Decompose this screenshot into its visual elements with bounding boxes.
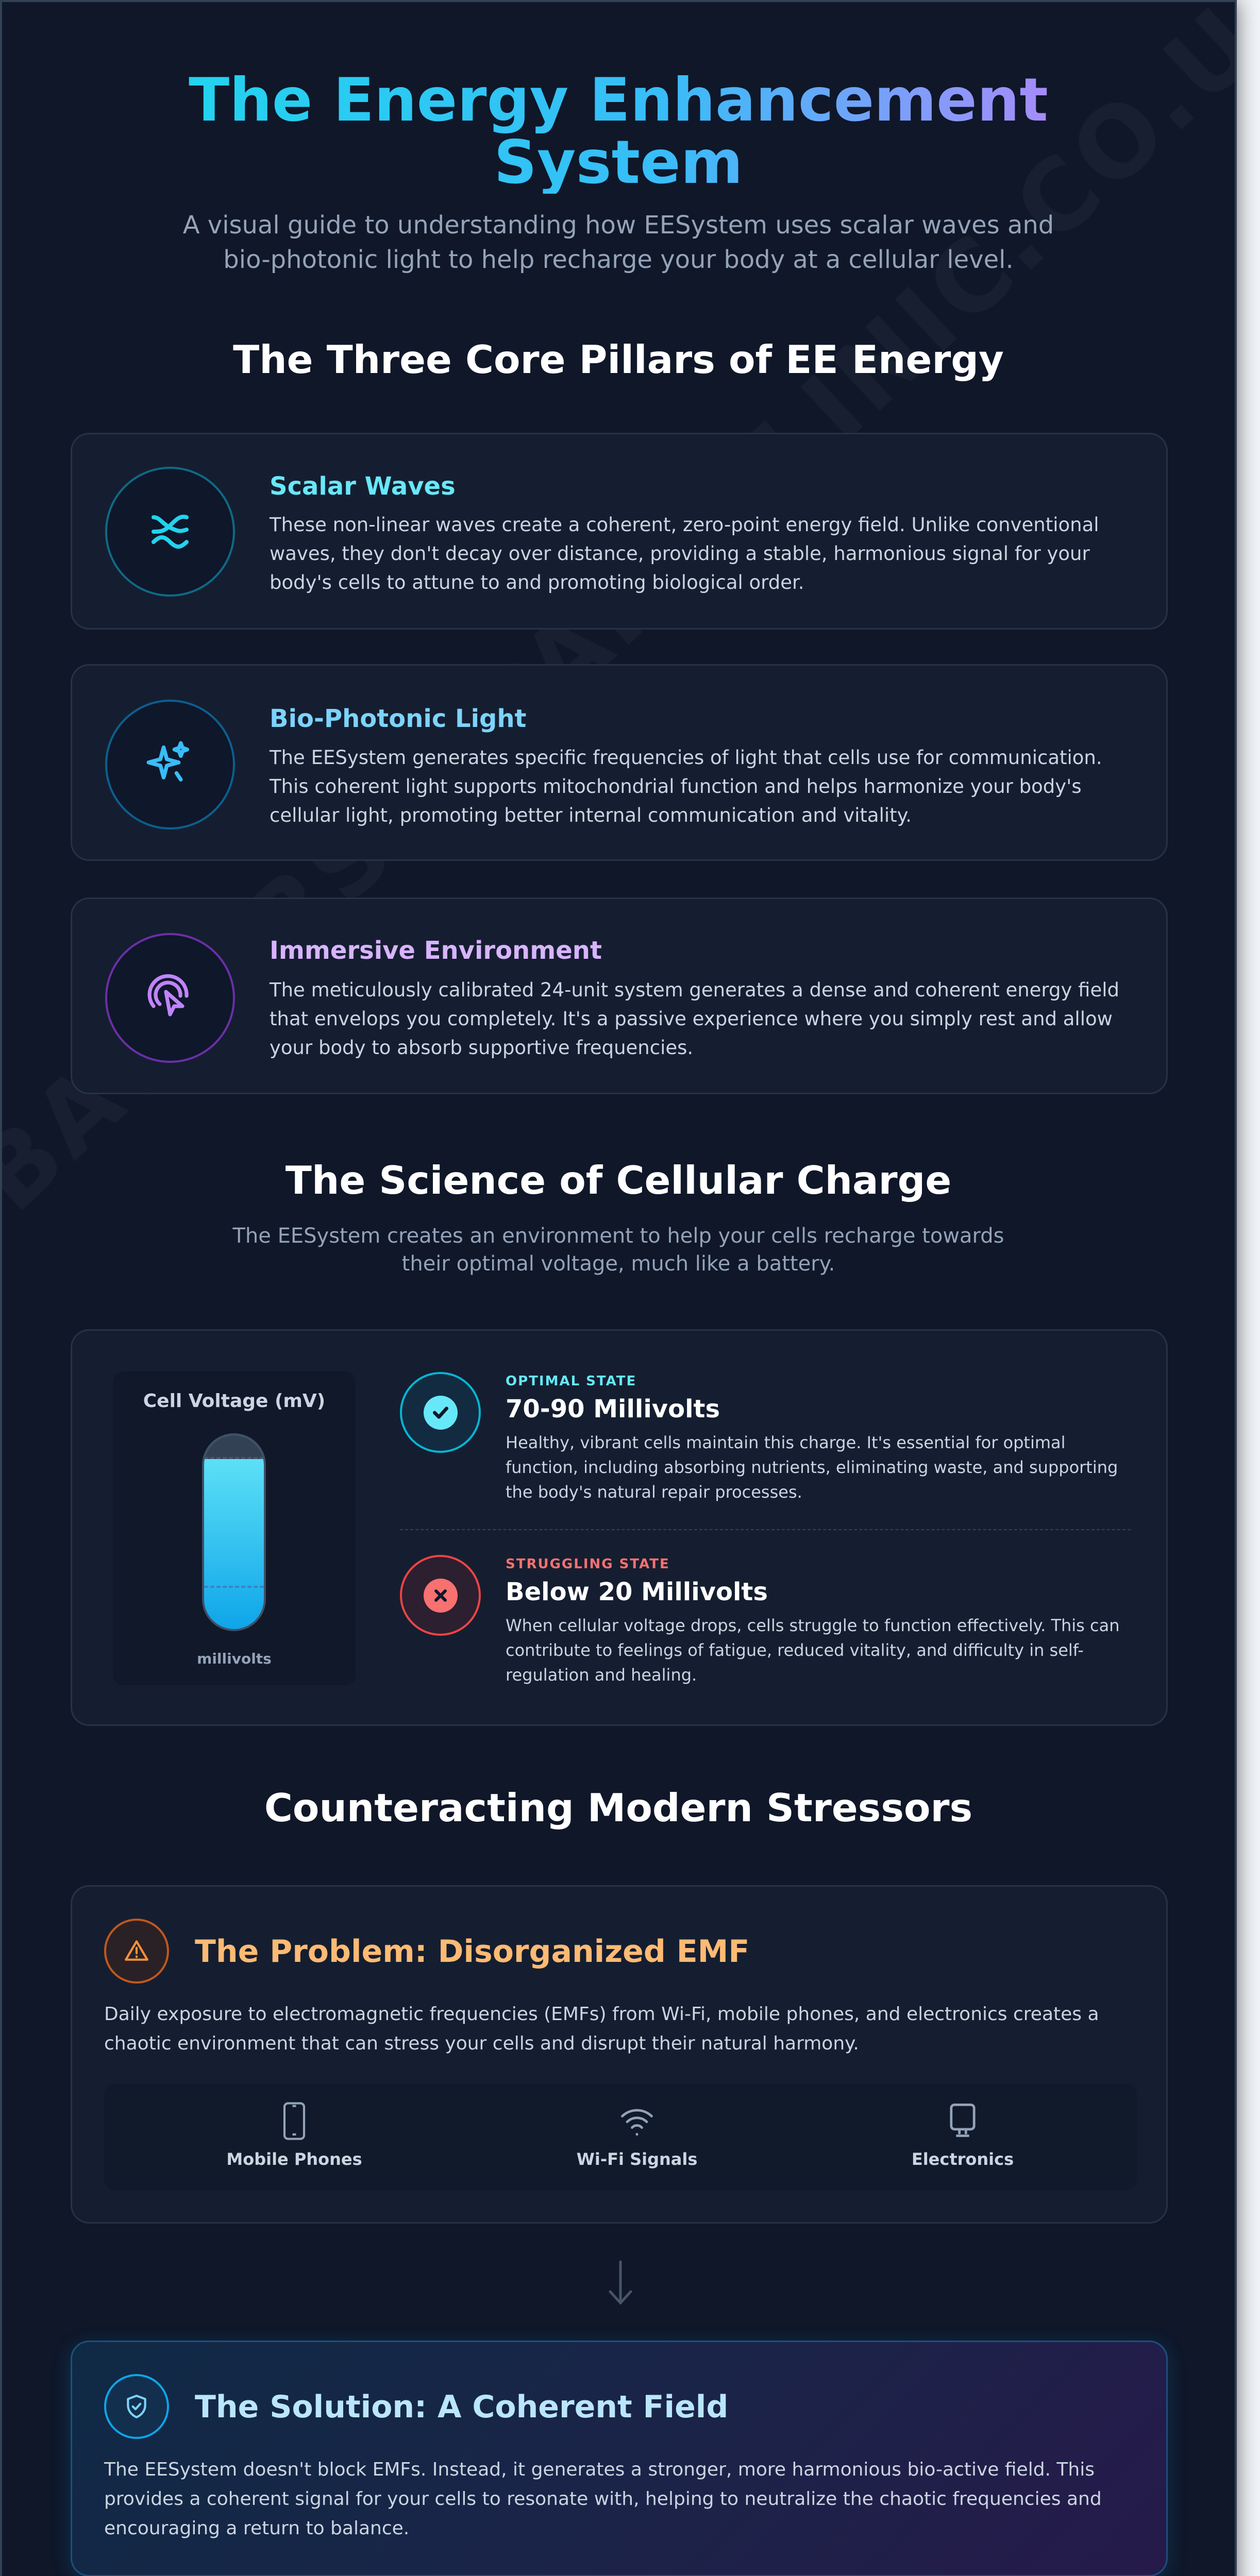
arrow bbox=[609, 2261, 632, 2305]
icon: electronics: Electronics bbox=[912, 2149, 1014, 2169]
heading: science: The Science of Cellular Charge bbox=[285, 1158, 951, 1203]
icon: wifi bbox=[577, 2109, 697, 2169]
struggling state text: STRUGGLING STATE bbox=[506, 1556, 670, 1572]
icon: electronics bbox=[912, 2104, 1014, 2169]
icon: wifi: Wi-Fi Signals bbox=[577, 2149, 697, 2169]
optimal state text bbox=[506, 1374, 1118, 1502]
chart: voltage tube: millivolts bbox=[197, 1650, 272, 1667]
icon: fingerprint cursor bbox=[105, 933, 235, 1063]
icon: warning bbox=[104, 1919, 169, 1984]
title: System bbox=[494, 128, 743, 197]
text: Bio-Photonic Light bbox=[270, 704, 527, 733]
heading: pillars: The Three Core Pillars of EE Energy bbox=[233, 337, 1004, 382]
subtitle: science: their optimal voltage, much like a battery. bbox=[402, 1252, 835, 1276]
panel: problem bbox=[71, 1885, 1168, 2224]
subtitle bbox=[183, 211, 1054, 274]
panel: scalar waves bbox=[71, 433, 1168, 630]
title: The Energy Enhancement bbox=[189, 65, 1048, 135]
optimal state text: Healthy, vibrant cells maintain this charge. It's essential for optimal function, including absorbing nutrients, eliminating waste, and supporting the body's natural repair processes. bbox=[506, 1433, 1118, 1502]
icon: cross bbox=[400, 1555, 481, 1636]
panel: immersive environment bbox=[71, 897, 1168, 1094]
optimal state text: 70-90 Millivolts bbox=[506, 1395, 720, 1423]
heading: stressors: Counteracting Modern Stressors bbox=[264, 1785, 972, 1831]
icon: mobile phones bbox=[226, 2102, 362, 2169]
struggling state text: When cellular voltage drops, cells struggle to function effectively. This can contribute to feelings of fatigue, reduced vitality, and difficulty in self-regulation and healing. bbox=[506, 1616, 1119, 1685]
sources bbox=[104, 2083, 1137, 2190]
icon: sparkles bbox=[105, 700, 235, 829]
panel: solution bbox=[71, 2341, 1168, 2576]
icon: mobile phones: Mobile Phones bbox=[226, 2149, 362, 2169]
struggling state text bbox=[506, 1556, 1119, 1685]
title: The Problem: Disorganized EMF bbox=[195, 1934, 749, 1970]
chart: voltage tube: Cell Voltage (mV) bbox=[143, 1391, 325, 1412]
text bbox=[269, 472, 1099, 594]
struggling state text: Below 20 Millivolts bbox=[506, 1578, 768, 1606]
subtitle: bio-photonic light to help recharge your body at a cellular level. bbox=[223, 245, 1014, 274]
panel: bio-photonic light bbox=[71, 664, 1168, 861]
text: These non-linear waves create a coherent, zero-point energy field. Unlike conventional waves, they don't decay over distance, providing a stable, harmonious signal for your body's cells to attune to and promoting biological order. bbox=[270, 514, 1099, 594]
icon: waves bbox=[105, 467, 235, 597]
optimal state text: OPTIMAL STATE bbox=[506, 1374, 636, 1389]
title: The Solution: A Coherent Field bbox=[195, 2389, 728, 2425]
text bbox=[269, 936, 1119, 1059]
text bbox=[269, 704, 1102, 826]
body: The EESystem doesn't block EMFs. Instead, it generates a stronger, more harmonious bio-active field. This provides a coherent signal for your cells to resonate with, helping to neutralize the chaotic frequencies and encouraging a return to balance. bbox=[104, 2459, 1102, 2539]
title bbox=[189, 65, 1048, 197]
subtitle: science bbox=[232, 1224, 1004, 1276]
text: Scalar Waves bbox=[270, 472, 456, 501]
text: The meticulously calibrated 24-unit system generates a dense and coherent energy field that envelops you completely. It's a passive experience where you simply rest and allow your body to absorb supportive frequencies. bbox=[270, 979, 1119, 1059]
panel: cellular charge bbox=[71, 1329, 1168, 1726]
text: The EESystem generates specific frequencies of light that cells use for communication. This coherent light supports mitochondrial function and helps harmonize your body's cellular light, promoting better internal communication and vitality. bbox=[270, 747, 1102, 826]
text: Immersive Environment bbox=[270, 936, 602, 965]
chart: voltage tube bbox=[113, 1371, 356, 1685]
subtitle: science: The EESystem creates an environment to help your cells recharge towards bbox=[232, 1224, 1004, 1248]
subtitle: A visual guide to understanding how EESystem uses scalar waves and bbox=[183, 211, 1054, 240]
icon: check bbox=[400, 1372, 481, 1453]
body: Daily exposure to electromagnetic frequencies (EMFs) from Wi-Fi, mobile phones, and electronics creates a chaotic environment that can stress your cells and disrupt their natural harmony. bbox=[104, 2004, 1099, 2054]
icon: shield bbox=[104, 2374, 169, 2439]
